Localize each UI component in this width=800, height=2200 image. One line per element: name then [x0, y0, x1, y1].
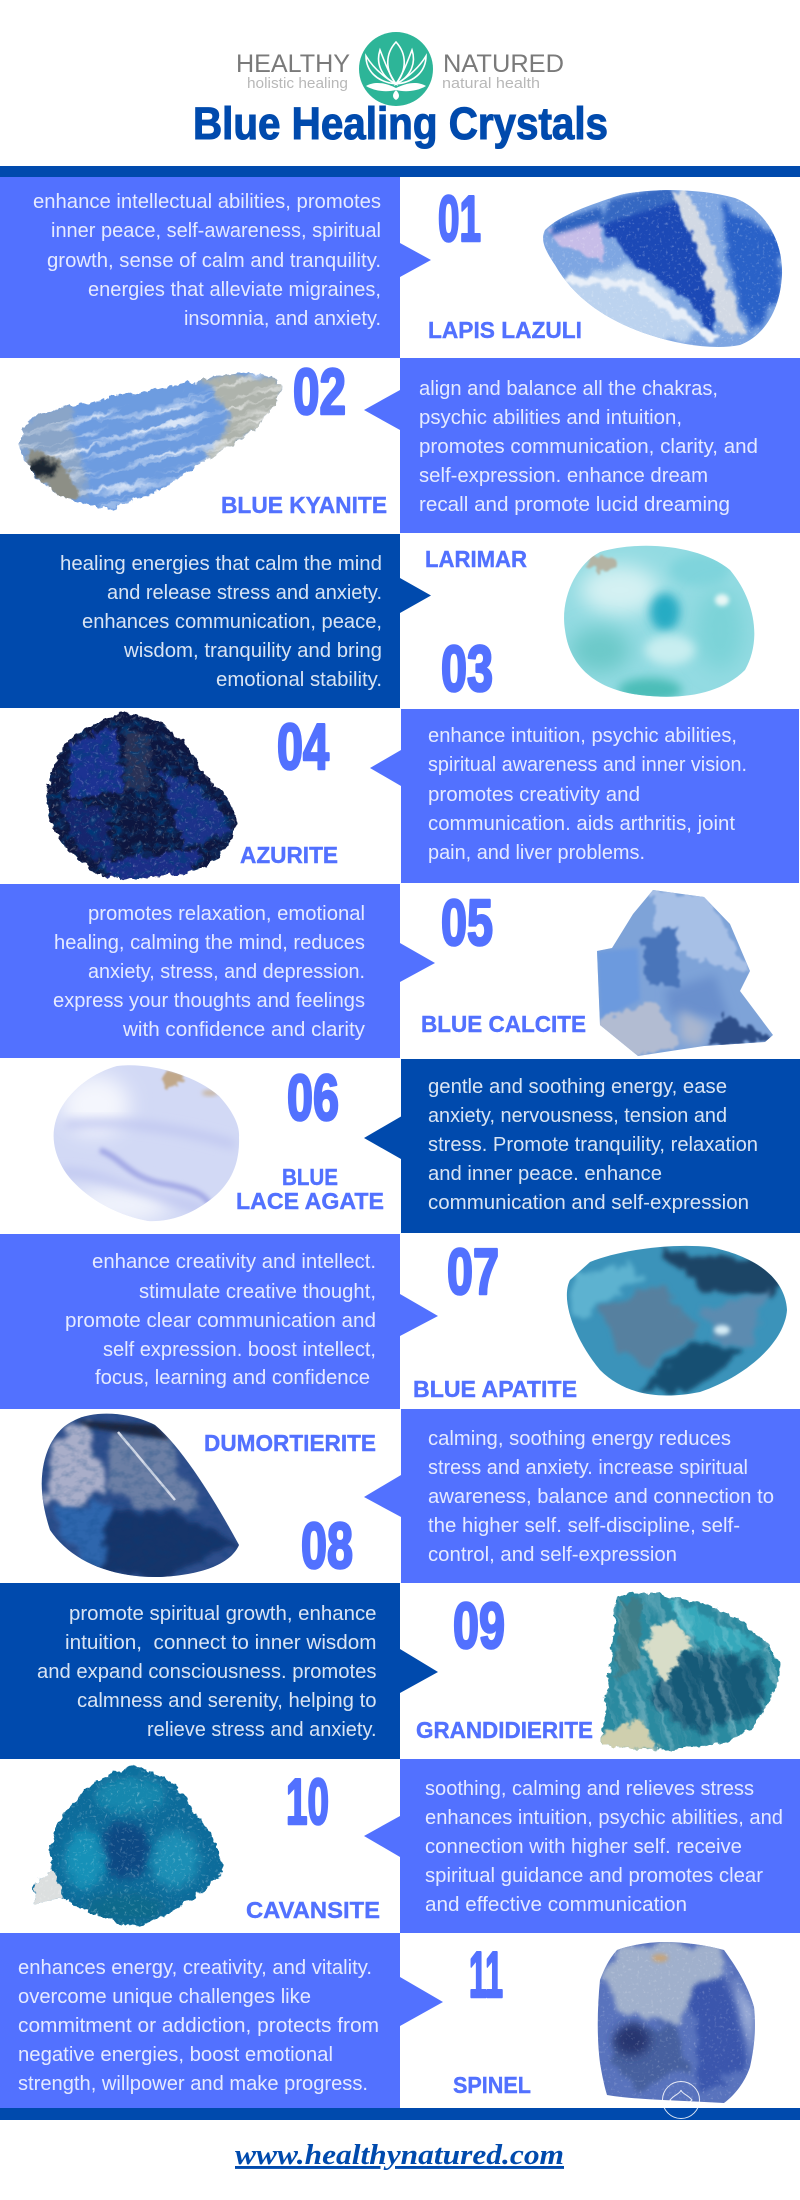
description text: anxiety, nervousness, tension and — [428, 1104, 727, 1127]
description text — [18, 1956, 379, 2095]
label: azurite: AZURITE — [240, 842, 338, 868]
description text: focus, learning and confidence — [95, 1366, 370, 1389]
number 08: 08 — [301, 1509, 353, 1582]
logo tagline: natural health: natural health — [442, 75, 540, 92]
number 06: 06 — [287, 1061, 339, 1134]
description text: inner peace, self-awareness, spiritual — [51, 219, 381, 242]
logo tagline: holistic healing: holistic healing — [247, 75, 348, 92]
description text: psychic abilities and intuition, — [419, 406, 682, 429]
description text: promotes relaxation, emotional — [88, 902, 365, 925]
description text: control, and self-expression — [428, 1543, 677, 1566]
panel: 07 blue apatite — [0, 1234, 790, 1409]
description text: emotional stability. — [216, 668, 382, 691]
label: blue lace agate — [236, 1164, 384, 1214]
description text — [428, 1427, 774, 1566]
description text: and release stress and anxiety. — [107, 581, 382, 604]
description panel — [0, 1583, 438, 1759]
icon: blue apatite stone — [566, 1246, 787, 1396]
description text: align and balance all the chakras, — [419, 377, 718, 400]
bottom divider bar — [0, 2108, 800, 2120]
description text: and expand consciousness. promotes — [37, 1660, 376, 1683]
description text: self expression. boost intellect, — [103, 1338, 376, 1361]
description panel — [370, 709, 799, 883]
panel: 05 blue calcite — [0, 884, 780, 1060]
number 04: 04 — [277, 710, 329, 783]
description text: promote spiritual growth, enhance — [69, 1602, 376, 1625]
description text: stimulate creative thought, — [139, 1280, 376, 1303]
description text: the higher self. self-discipline, self- — [428, 1514, 740, 1537]
description panel — [0, 884, 435, 1058]
description text: pain, and liver problems. — [428, 841, 645, 864]
panel: 03 larimar — [0, 534, 765, 708]
description text: overcome unique challenges like — [18, 1985, 311, 2008]
description text: energies that alleviate migraines, — [88, 278, 381, 301]
description text: enhances energy, creativity, and vitality. — [18, 1956, 372, 1979]
title: Blue Healing Crystals — [193, 98, 608, 149]
description text: wisdom, tranquility and bring — [123, 639, 382, 662]
description text: stress and anxiety. increase spiritual — [428, 1456, 748, 1479]
panel: 11 spinel: 11 — [469, 1938, 503, 2011]
label: blue calcite: BLUE CALCITE — [421, 1011, 586, 1037]
description text — [60, 552, 382, 691]
description text: communication. aids arthritis, joint — [428, 812, 735, 835]
icon: grandidierite stone — [600, 1592, 780, 1752]
icon: lapis lazuli stone — [543, 190, 782, 347]
label: dumortierite: DUMORTIERITE — [204, 1430, 376, 1456]
description text: strength, willpower and make progress. — [18, 2072, 368, 2095]
description text: relieve stress and anxiety. — [147, 1718, 376, 1741]
description text: enhances intuition, psychic abilities, and — [425, 1806, 783, 1829]
panel: 01 lapis lazuli — [0, 177, 790, 358]
description text: calmness and serenity, helping to — [77, 1689, 376, 1712]
label: cavansite: CAVANSITE — [246, 1897, 380, 1923]
label: blue lace agate: BLUE — [282, 1164, 338, 1190]
description text: insomnia, and anxiety. — [184, 307, 381, 330]
description text: with confidence and clarity — [122, 1018, 366, 1041]
icon: cavansite stone — [30, 1765, 230, 1930]
icon: blue calcite stone — [595, 885, 780, 1060]
number 09: 09 — [453, 1589, 505, 1662]
number 10: 10 — [286, 1765, 329, 1838]
description text: enhance intellectual abilities, promotes — [33, 190, 381, 213]
description text: negative energies, boost emotional — [18, 2043, 333, 2066]
number 02: 02 — [293, 355, 346, 428]
label: spinel: SPINEL — [453, 2072, 531, 2098]
description text — [428, 724, 747, 864]
description text: gentle and soothing energy, ease — [428, 1075, 727, 1098]
description text: communication and self-expression — [428, 1191, 749, 1214]
panel: 06 blue lace agate — [45, 1059, 800, 1233]
description text: growth, sense of calm and tranquility. — [47, 249, 381, 272]
description text: spiritual guidance and promotes clear — [425, 1864, 763, 1887]
panel: 04 azurite — [45, 709, 799, 885]
description text: healing energies that calm the mind — [60, 552, 382, 575]
description text — [53, 902, 366, 1041]
description text: and effective communication — [425, 1893, 687, 1916]
number 01: 01 — [438, 182, 481, 255]
top divider bar — [0, 166, 800, 177]
logo emblem: lotus in teal circle — [359, 32, 433, 106]
description text: connection with higher self. receive — [425, 1835, 742, 1858]
description panel — [364, 358, 800, 533]
footer url: www.healthynatured.com — [235, 2139, 564, 2171]
panel: 10 cavansite — [30, 1759, 800, 1933]
number 05: 05 — [441, 886, 493, 959]
label: blue kyanite: BLUE KYANITE — [221, 492, 387, 518]
panel: 11 spinel — [0, 1933, 757, 2108]
icon: spinel stone — [595, 1940, 757, 2105]
description text — [428, 1075, 758, 1214]
description text: and inner peace. enhance — [428, 1162, 662, 1185]
description panel — [0, 1234, 438, 1409]
watermark lotus — [662, 2082, 700, 2118]
description panel — [364, 1059, 800, 1233]
icon: dumortierite stone — [35, 1410, 245, 1580]
description panel — [0, 1933, 443, 2108]
description text — [65, 1250, 376, 1389]
logo wordmark: healthy: HEALTHY — [236, 50, 350, 78]
number 07: 07 — [447, 1235, 499, 1308]
description text — [33, 190, 381, 330]
description text: stress. Promote tranquility, relaxation — [428, 1133, 758, 1156]
description text: spiritual awareness and inner vision. — [428, 753, 747, 776]
label: blue apatite: BLUE APATITE — [413, 1376, 577, 1402]
panel: 08 dumortierite — [35, 1409, 800, 1583]
label: blue lace agate: LACE AGATE — [236, 1188, 384, 1214]
panel: 02 blue kyanite — [18, 358, 800, 533]
description text: enhances communication, peace, — [82, 610, 382, 633]
description text: calming, soothing energy reduces — [428, 1427, 731, 1450]
description text: recall and promote lucid dreaming — [419, 493, 730, 516]
label: lapis lazuli: LAPIS LAZULI — [428, 317, 582, 343]
description text: commitment or addiction, protects from — [18, 2014, 379, 2037]
header logo — [236, 32, 564, 106]
description text: awareness, balance and connection to — [428, 1485, 774, 1508]
number 03: 03 — [441, 632, 493, 705]
panel: 09 grandidierite — [0, 1530, 800, 1814]
description panel — [0, 534, 431, 708]
icon: azurite stone — [45, 710, 240, 885]
icon: blue lace agate stone — [54, 1065, 239, 1222]
description text: express your thoughts and feelings — [53, 989, 365, 1012]
description text — [419, 377, 758, 516]
description text: self-expression. enhance dream — [419, 464, 708, 487]
description text: enhance intuition, psychic abilities, — [428, 724, 737, 747]
label: larimar: LARIMAR — [425, 546, 527, 572]
description text: soothing, calming and relieves stress — [425, 1777, 754, 1800]
icon: blue kyanite stone — [18, 372, 282, 511]
logo wordmark: natured: NATURED — [443, 50, 564, 78]
description panel — [0, 177, 431, 358]
icon: larimar stone — [564, 546, 754, 697]
description text: promotes communication, clarity, and — [419, 435, 758, 458]
description text: enhance creativity and intellect. — [92, 1250, 376, 1273]
description panel — [364, 1409, 800, 1583]
description text — [425, 1777, 783, 1916]
description panel — [364, 1759, 800, 1933]
description text: promotes creativity and — [428, 783, 640, 806]
description text: anxiety, stress, and depression. — [88, 960, 365, 983]
description text: healing, calming the mind, reduces — [54, 931, 365, 954]
description text: intuition, connect to inner wisdom — [65, 1631, 376, 1654]
label: grandidierite: GRANDIDIERITE — [416, 1717, 593, 1743]
description text: promote clear communication and — [65, 1309, 376, 1332]
description text — [37, 1602, 376, 1741]
